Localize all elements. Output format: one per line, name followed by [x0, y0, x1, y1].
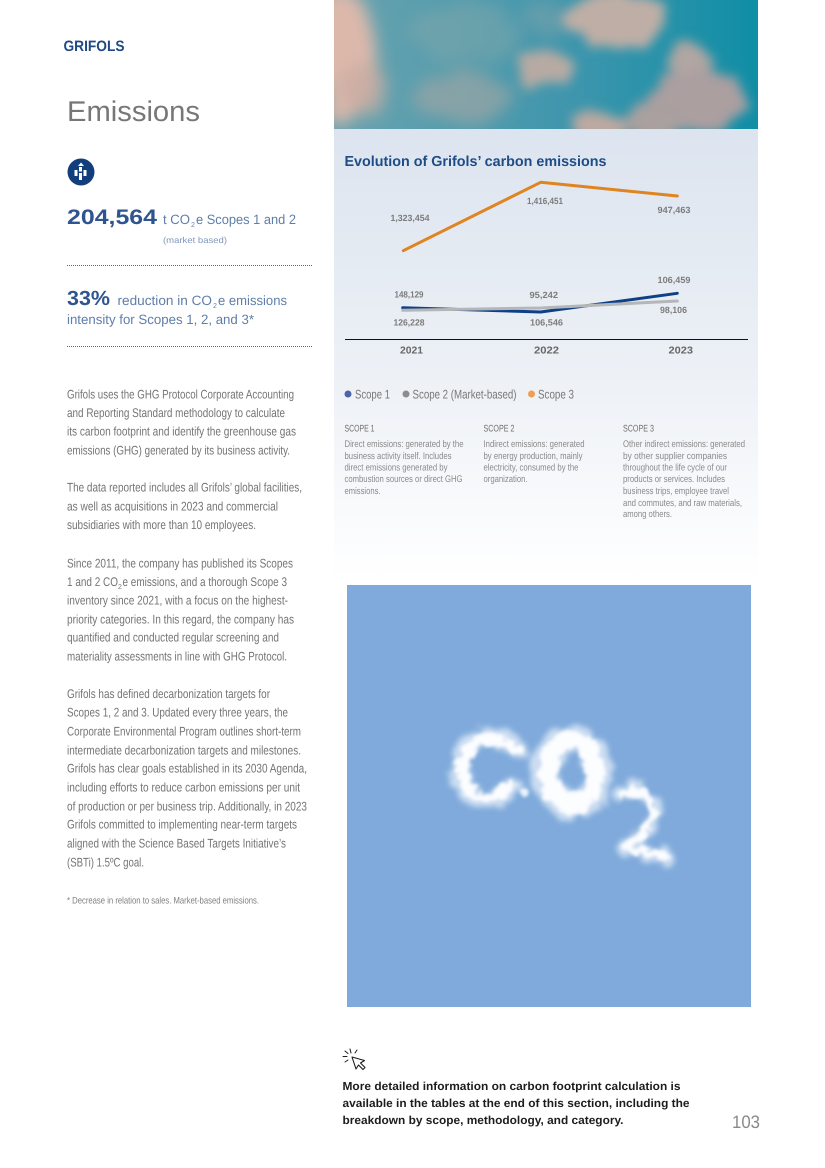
logo: Grifols: GRIFOLS — [64, 38, 124, 55]
data labels: 98,106 — [660, 305, 687, 315]
key figure: Scopes 1 and 2: (market based) — [163, 235, 227, 245]
body text: Grifols has clear goals established in its 2030 Agenda, — [67, 762, 307, 776]
scope 3 definition: among others. — [623, 509, 672, 520]
legend: Scope 2 (Market-based) — [412, 388, 516, 402]
page number: 103 — [732, 1112, 760, 1132]
key figure: intensity reduction: 2 — [213, 303, 217, 310]
legend — [344, 388, 574, 402]
body text: subsidiaries with more than 10 employees. — [67, 518, 256, 532]
key figure: Scopes 1 and 2 — [67, 206, 296, 245]
year labels: 2021 — [400, 346, 423, 356]
scope 2 definition: Indirect emissions: generated — [484, 439, 584, 450]
body text: emissions (GHG) generated by its business activity. — [67, 444, 290, 458]
scope 2 definition: SCOPE 2 — [484, 424, 514, 434]
body text: materiality assessments in line with GHG Protocol. — [67, 650, 287, 664]
scope 2 definition: organization. — [484, 474, 528, 485]
scope 3 definition: Other indirect emissions: generated — [623, 439, 745, 450]
body text: Grifols uses the GHG Protocol Corporate Accounting — [67, 388, 294, 402]
body text: inventory since 2021, with a focus on the highest- — [67, 594, 288, 608]
scope 1 definition: SCOPE 1 — [344, 424, 374, 434]
body text: (SBTi) 1.5ºC goal. — [67, 856, 144, 870]
year labels: 2022 — [534, 346, 559, 356]
body text: of production or per business trip. Additionally, in 2023 — [67, 800, 307, 814]
body text: and Reporting Standard methodology to calculate — [67, 406, 285, 420]
body text: intermediate decarbonization targets and milestones. — [67, 744, 301, 758]
key figure: intensity reduction — [67, 287, 287, 327]
series: Scope 1 — [403, 293, 677, 312]
photo: CO2 written in clouds — [347, 585, 751, 1007]
title: Emissions — [67, 96, 200, 128]
scope 3 definition: by other supplier companies — [623, 451, 727, 462]
scope 3 definition: business trips, employee travel — [623, 486, 729, 497]
key figure: intensity reduction: e emissions — [218, 293, 287, 308]
scope 3 definition: products or services. Includes — [623, 474, 725, 485]
body text: Scopes 1, 2 and 3. Updated every three years, the — [67, 706, 288, 720]
body text: Corporate Environmental Program outlines short-term — [67, 724, 301, 738]
data labels: 1,416,451 — [527, 196, 563, 206]
key figure: intensity reduction: reduction in CO — [118, 293, 212, 308]
body text: as well as acquisitions in 2023 and commercial — [67, 500, 278, 514]
body text: quantified and conducted regular screening and — [67, 630, 279, 644]
chart axis — [345, 338, 748, 340]
line chart — [345, 182, 748, 356]
scope 3 definition: and commutes, and raw materials, — [623, 498, 742, 509]
data labels: 148,129 — [394, 290, 424, 300]
key figure: intensity reduction: intensity for Scopes 1, 2, and 3* — [67, 312, 255, 327]
legend: Scope 1 — [355, 388, 390, 402]
data labels: 1,323,454 — [390, 213, 430, 223]
scope 2 definition: by energy production, mainly — [484, 451, 583, 462]
body text: 1 and 2 CO — [67, 575, 118, 589]
body text: including efforts to reduce carbon emissions per unit — [67, 780, 300, 794]
scope 1 definition: emissions. — [344, 486, 380, 497]
chart title: Evolution of Grifols’ carbon emissions — [344, 154, 606, 170]
data labels: 106,459 — [658, 275, 690, 285]
scope 1 definition: Direct emissions: generated by the — [344, 439, 464, 450]
scope 1 definition: business activity itself. Includes — [344, 451, 452, 462]
scope 2 definition — [484, 424, 584, 485]
series: Scope 3 — [403, 182, 677, 251]
series: Scope 2 — [403, 301, 677, 310]
year labels — [400, 346, 693, 356]
key figure: Scopes 1 and 2: 204,564 — [67, 206, 157, 229]
scope 3 definition: throughout the life cycle of our — [623, 462, 728, 474]
key figure: intensity reduction: 33% — [67, 287, 110, 310]
data labels: 106,546 — [530, 318, 563, 328]
callout: more detailed information: available in the tables at the end of this section, including the — [342, 1097, 690, 1110]
key figure: Scopes 1 and 2: e Scopes 1 and 2 — [196, 212, 296, 227]
callout: more detailed information — [342, 1080, 690, 1127]
scope 2 definition: electricity, consumed by the — [484, 462, 578, 474]
key figure: Scopes 1 and 2: t CO — [163, 212, 190, 227]
legend: Scope 3 — [538, 388, 574, 402]
icon: cursor click — [343, 1049, 365, 1070]
body text: aligned with the Science Based Targets Initiative’s — [67, 836, 286, 850]
panel: chart background — [334, 129, 758, 580]
data labels: 947,463 — [658, 205, 690, 215]
callout: more detailed information: More detailed information on carbon footprint calculation is — [342, 1080, 680, 1093]
data labels — [390, 196, 690, 328]
scope 1 definition: direct emissions generated by — [344, 462, 448, 474]
scope 1 definition: combustion sources or direct GHG — [344, 474, 462, 485]
body text: Grifols committed to implementing near-term targets — [67, 818, 297, 832]
scope 1 definition — [344, 424, 464, 497]
body text: Grifols has defined decarbonization targets for — [67, 687, 270, 701]
icon: rising bars — [68, 158, 94, 186]
data labels: 95,242 — [530, 290, 558, 300]
scope 3 definition: SCOPE 3 — [623, 424, 654, 434]
footnote: * Decrease in relation to sales. Market-based emissions. — [67, 896, 259, 906]
body text — [67, 388, 307, 870]
data labels: 126,228 — [394, 318, 424, 328]
callout: more detailed information: breakdown by scope, methodology, and category. — [342, 1114, 624, 1127]
scope 3 definition — [623, 424, 745, 520]
body text: e emissions, and a thorough Scope 3 — [122, 575, 287, 589]
body text: its carbon footprint and identify the greenhouse gas — [67, 424, 296, 438]
key figure: Scopes 1 and 2: 2 — [191, 222, 195, 229]
body text: Since 2011, the company has published its Scopes — [67, 556, 293, 570]
year labels: 2023 — [668, 346, 693, 356]
body text: 2 — [118, 584, 122, 591]
photo: sky with clouds — [334, 0, 758, 129]
body text: priority categories. In this regard, the company has — [67, 612, 294, 626]
body text: The data reported includes all Grifols’ global facilities, — [67, 480, 302, 494]
